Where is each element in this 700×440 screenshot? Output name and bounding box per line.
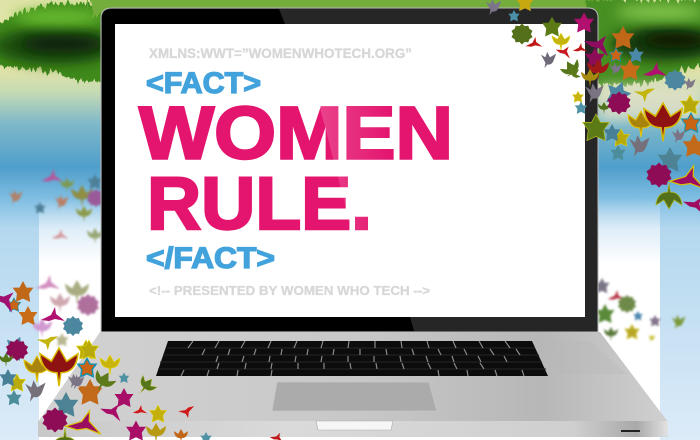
trackpad — [272, 382, 437, 411]
closing fact tag: </FACT> — [146, 242, 275, 275]
flowers top right over laptop — [486, 0, 700, 214]
flowers bottom left over laptop — [0, 281, 286, 440]
opening fact tag: <FACT> — [146, 67, 261, 100]
clouds and reflections right — [600, 85, 700, 120]
xmlns heading: XMLNS:WWT=”WOMENWHOTECH.ORG” — [149, 46, 412, 61]
blurred background flowers — [9, 169, 685, 346]
headline glare — [318, 100, 400, 235]
keyboard — [156, 341, 548, 376]
headline: rule: RULE. — [147, 162, 372, 245]
lid release notch — [316, 421, 393, 430]
laptop lid bezel — [101, 8, 598, 332]
base front edge — [38, 421, 668, 437]
laptop base — [38, 332, 668, 437]
background grass top — [90, 0, 620, 16]
background grass left — [0, 3, 125, 82]
status slot — [621, 430, 640, 432]
bezel black reflection — [102, 9, 414, 331]
headline: women: WOMEN — [139, 92, 453, 174]
presented by comment: <!-- PRESENTED BY WOMEN WHO TECH --> — [149, 283, 430, 298]
background grass right — [585, 0, 700, 85]
laptop screen — [115, 24, 585, 317]
palm rest shading — [545, 341, 627, 374]
